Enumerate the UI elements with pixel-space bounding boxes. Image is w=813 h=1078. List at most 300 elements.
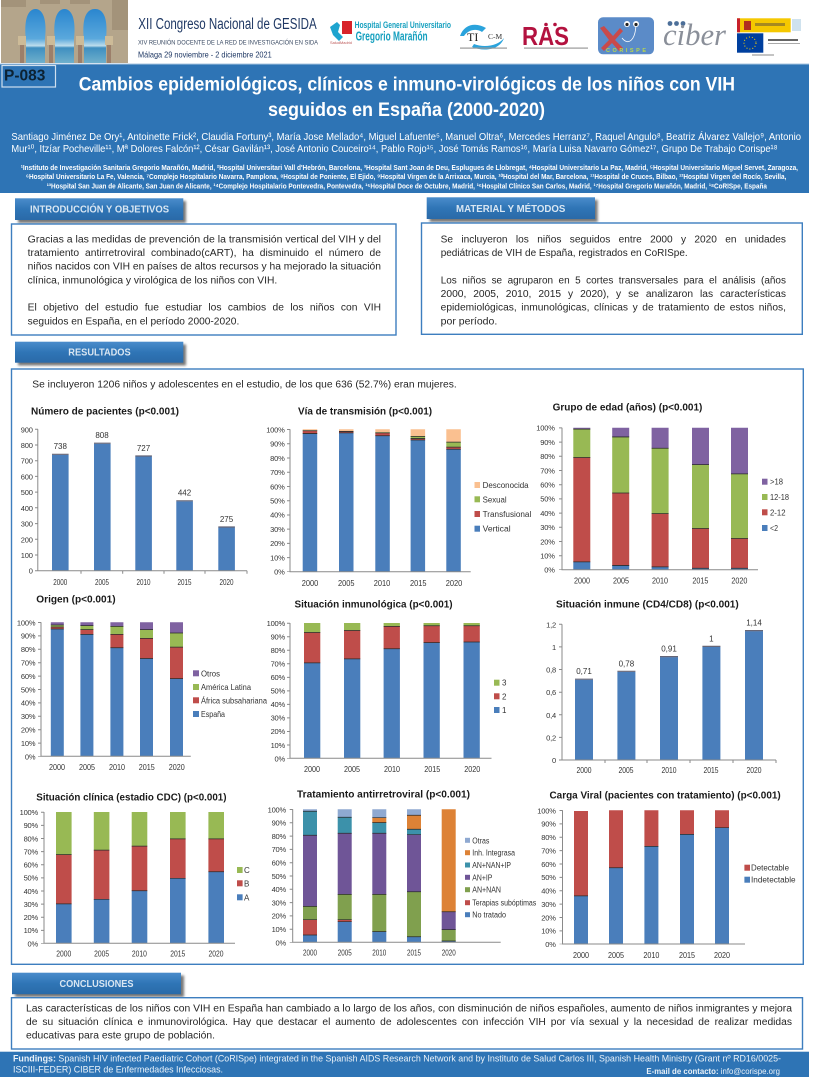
x axis labels: 2005 <box>613 577 629 586</box>
legend: 2-12 <box>770 508 786 517</box>
y axis labels: 20% <box>24 913 39 922</box>
chart title: Vía de transmisión (p<0.001) <box>298 406 432 418</box>
x axis labels: 2020 <box>220 578 234 587</box>
panel: introducción: niños nacidos con VIH en países de altos recursos y ha mejorado la situación <box>28 262 381 273</box>
panel: material y métodos: 2000, 2005, 2010, 2015 y 2020), y se analizaron las características <box>441 289 786 300</box>
x axis labels: 2010 <box>643 951 660 960</box>
y axis labels: 40% <box>24 887 39 896</box>
y axis labels: 70% <box>540 466 555 475</box>
legend: >18 <box>770 478 784 487</box>
x axis labels <box>576 766 762 775</box>
y axis labels: 50% <box>270 496 285 506</box>
y axis labels: 100% <box>266 425 285 434</box>
y axis labels: 10% <box>21 739 36 748</box>
legend: C <box>244 866 250 875</box>
legend <box>193 669 268 719</box>
x axis labels <box>302 579 463 588</box>
x axis labels: 2010 <box>384 765 400 774</box>
poster number <box>2 66 56 87</box>
x axis labels: 2020 <box>714 951 730 960</box>
y axis labels: 70% <box>541 846 556 855</box>
x axis labels: 2005 <box>344 765 360 774</box>
funding text: ISCIII-FEDER) CIBER de Enfermedades Infecciosas. <box>13 1065 223 1076</box>
x axis labels: 2010 <box>372 949 387 958</box>
y axis labels: 500 <box>21 488 33 497</box>
panel: material y métodos: pediátricas de VIH de España, registrados en CoRISpe. <box>441 248 688 259</box>
x axis labels: 2010 <box>662 766 677 775</box>
logo: RIS: RAS <box>522 21 569 51</box>
chart: origen <box>17 594 268 772</box>
header logos strip <box>1 0 801 63</box>
value labels: 1,14 <box>746 619 762 628</box>
x axis labels: 2000 <box>302 579 319 588</box>
x axis labels: 2005 <box>608 951 624 960</box>
series: Detectable <box>574 810 729 896</box>
logo: hospital <box>330 20 451 45</box>
legend: España <box>201 710 225 719</box>
x axis labels: 2005 <box>618 766 634 775</box>
series: estadio 2 <box>304 626 480 663</box>
value labels <box>54 431 234 524</box>
panel: introducción: tratamiento antirretroviral combinado(cART), ha disminuido el número de <box>28 248 381 259</box>
y axis labels: 700 <box>21 457 33 466</box>
logo: hospital: Gregorio Marañón <box>356 29 428 44</box>
legend: <2 <box>770 524 778 533</box>
y axis labels: 400 <box>21 504 33 513</box>
x axis labels: 2000 <box>49 763 65 772</box>
y axis labels: 100% <box>20 808 39 817</box>
x axis labels: 2005 <box>95 578 109 587</box>
y axis labels: 900 <box>21 425 33 434</box>
series: menor de 2 <box>573 562 748 570</box>
series: estadio 3 <box>304 623 480 632</box>
x axis labels: 2020 <box>169 763 185 772</box>
legend: Otros <box>201 669 220 678</box>
legend: 12-18 <box>770 493 790 502</box>
x axis labels: 2000 <box>576 766 592 775</box>
logo: ciber: ciber <box>663 17 727 52</box>
y axis labels: 60% <box>541 860 556 869</box>
congress photo: moorish arches <box>1 0 128 63</box>
chart title: Situación inmune (CD4/CD8) (p<0.001) <box>556 598 739 610</box>
section header: material y métodos: MATERIAL Y MÉTODOS <box>456 202 566 215</box>
y axis labels: 70% <box>271 660 286 669</box>
x axis labels: 2015 <box>178 578 192 587</box>
legend <box>465 836 536 920</box>
panel: material y métodos: por período. <box>441 317 497 328</box>
series: Inh. Integrasa <box>372 809 456 912</box>
y axis labels: 100% <box>267 619 286 628</box>
x axis labels: 2005 <box>79 763 95 772</box>
y axis labels: 10% <box>270 554 285 562</box>
chart title: Tratamiento antirretroviral (p<0.001) <box>297 789 470 801</box>
series: Terapias subóptimas <box>303 920 352 935</box>
legend: 1 <box>502 706 507 715</box>
logo: TI-C-M: C-M <box>488 32 502 41</box>
y axis labels: 0% <box>28 939 39 948</box>
panel: introducción: Gracias a las medidas de prevención de la transmisión vertical del VIH y del <box>28 234 381 245</box>
legend: AN+IP <box>472 873 492 882</box>
y axis labels <box>537 806 556 949</box>
y axis labels: 80% <box>24 834 39 843</box>
logo: TI-C-M: TI <box>467 30 478 44</box>
series: Transfusional <box>303 431 461 449</box>
y axis labels: 70% <box>21 658 36 668</box>
panel: resultados <box>12 369 803 964</box>
affiliations <box>21 165 798 190</box>
y axis labels: 80% <box>272 832 287 841</box>
series: 2-12 <box>573 458 748 568</box>
value labels: 727 <box>137 444 151 453</box>
section header: introducción y objetivos <box>15 198 186 223</box>
stacked bars <box>573 428 748 570</box>
y axis labels: 0% <box>275 754 286 763</box>
legend: Indetectable <box>751 876 796 885</box>
y axis labels: 60% <box>21 672 36 681</box>
panel: material y métodos: Los niños se agruparon en 5 cortes transversales para el análisis (años <box>441 275 786 286</box>
y axis labels: 60% <box>270 482 285 491</box>
y axis labels: 0% <box>276 938 287 947</box>
stacked bars <box>303 809 456 942</box>
y axis labels: 90% <box>24 821 39 830</box>
y axis labels <box>21 425 33 576</box>
y axis labels: 30% <box>24 900 39 909</box>
panel: introducción: El objetivo del estudio fue estudiar los cambios de los niños con VIH <box>28 303 381 314</box>
y axis labels: 60% <box>271 673 286 682</box>
legend <box>762 478 790 533</box>
x axis labels: 2005 <box>94 950 110 959</box>
series: AN+IP <box>303 833 456 930</box>
x axis labels: 2010 <box>374 579 391 588</box>
y axis labels: 0% <box>25 752 36 761</box>
y axis labels: 50% <box>272 872 287 881</box>
legend <box>744 864 796 885</box>
y axis labels: 0% <box>544 566 555 575</box>
y axis labels: 40% <box>272 885 287 894</box>
chart: carga viral <box>537 790 796 960</box>
x axis labels: 2000 <box>303 949 317 958</box>
panel: conclusiones: Las características de los niños con VIH en España han cambiado a lo largo de los años, con disminución de niños españoles, aumento de niños inmigrantes y mejora <box>26 1004 792 1015</box>
y axis labels: 40% <box>21 699 36 708</box>
legend: B <box>244 879 249 888</box>
panel: conclusiones: educativas para este grupo de población. <box>26 1030 215 1041</box>
legend: Sexual <box>483 495 507 504</box>
footer: funding and contact <box>0 1052 809 1077</box>
x axis labels <box>574 577 748 586</box>
x axis labels <box>304 765 481 774</box>
y axis labels: 80% <box>540 452 555 461</box>
y axis labels: 40% <box>540 509 555 518</box>
legend: 2 <box>502 692 507 701</box>
series: 12-18 <box>573 429 748 538</box>
stacked bars <box>303 429 461 572</box>
legend: Inh. Integrasa <box>472 849 515 858</box>
congress subtitle: XIV REUNIÓN DOCENTE DE LA RED DE INVESTIGACIÓN EN SIDA <box>138 39 318 46</box>
x axis labels: 2005 <box>338 579 355 588</box>
chart title: Grupo de edad (años) (p<0.001) <box>553 401 702 413</box>
y axis labels: 100% <box>536 424 555 433</box>
chart: situación inmune CD4/CD8 <box>546 598 776 775</box>
results summary: Se incluyeron 1206 niños y adolescentes en el estudio, de los que 636 (52.7%) eran mujeres. <box>32 379 457 390</box>
panel: introducción <box>12 224 396 335</box>
x axis labels: 2015 <box>679 951 695 960</box>
chart: grupo de edad <box>536 401 790 586</box>
x axis labels: 2020 <box>731 577 748 586</box>
series: África subsahariana <box>51 627 183 679</box>
x axis labels: 2015 <box>692 577 709 586</box>
x axis labels <box>56 950 224 959</box>
legend: Detectable <box>751 864 790 873</box>
y axis labels: 0,2 <box>546 733 556 742</box>
panel: material y métodos: epidemiológicas, inmunológicas, clínicas y de tratamiento de estos niños, <box>441 303 786 314</box>
panel: material y métodos <box>422 223 802 334</box>
funding text <box>13 1054 781 1076</box>
y axis labels: 0,6 <box>546 688 556 697</box>
value labels: 0,71 <box>576 667 592 676</box>
chart title: Carga Viral (pacientes con tratamiento) (p<0.001) <box>550 790 781 802</box>
bars <box>52 444 235 571</box>
y axis labels: 40% <box>541 886 556 896</box>
y axis labels: 0,8 <box>546 666 556 674</box>
legend: 3 <box>502 679 507 688</box>
poster number: P-083 <box>4 68 46 84</box>
legend: América Latina <box>201 683 252 692</box>
y axis labels: 300 <box>21 520 33 529</box>
authors <box>11 130 801 155</box>
panel: conclusiones <box>12 998 802 1049</box>
x axis labels: 2010 <box>652 577 668 586</box>
legend: Vertical <box>483 525 511 534</box>
chart title: Situación clínica (estadio CDC) (p<0.001) <box>36 791 226 803</box>
chart: situación inmunológica <box>267 598 507 774</box>
y axis labels: 50% <box>540 495 555 504</box>
x axis labels: 2015 <box>704 766 719 775</box>
series: Vertical <box>303 433 461 572</box>
y axis labels: 90% <box>541 820 556 829</box>
y axis labels: 40% <box>270 511 285 520</box>
y axis labels: 70% <box>272 845 287 854</box>
y axis labels: 70% <box>270 468 285 477</box>
legend <box>494 679 507 715</box>
y axis labels: 80% <box>21 645 36 654</box>
y axis labels: 30% <box>271 714 286 723</box>
y axis labels <box>268 805 287 947</box>
y axis labels: 50% <box>271 687 286 696</box>
value labels: 0,91 <box>661 645 677 654</box>
x axis labels: 2000 <box>304 765 320 774</box>
y axis labels: 10% <box>24 926 39 935</box>
series: Desconocida <box>303 429 461 442</box>
section header: conclusiones: CONCLUSIONES <box>60 979 134 990</box>
value labels <box>576 619 762 676</box>
y axis labels <box>17 618 36 761</box>
legend: Desconocida <box>483 481 529 490</box>
y axis labels: 40% <box>271 700 286 709</box>
y axis labels: 90% <box>540 438 555 447</box>
poster title: seguidos en España (2000-2020) <box>268 99 545 121</box>
y axis labels: 20% <box>541 913 556 922</box>
x axis labels: 2000 <box>574 577 590 586</box>
series: mayor de 18 <box>573 428 748 474</box>
y axis labels: 90% <box>272 819 287 828</box>
y axis labels: 30% <box>270 525 285 534</box>
legend: Otras <box>472 836 489 845</box>
y axis labels: 0% <box>274 568 285 577</box>
y axis labels: 20% <box>540 537 555 546</box>
y axis labels: 30% <box>541 900 556 909</box>
chart title: Origen (p<0.001) <box>36 594 116 606</box>
y axis labels: 20% <box>271 727 286 736</box>
y axis labels: 80% <box>271 646 286 655</box>
series: Otras <box>303 809 421 818</box>
x axis labels: 2020 <box>446 579 463 588</box>
x axis labels: 2000 <box>573 951 589 960</box>
y axis labels: 10% <box>272 925 287 934</box>
y axis labels: 600 <box>21 472 33 481</box>
series: AN+NAN+IP <box>303 811 421 835</box>
chart: tratamiento antirretroviral <box>268 789 536 958</box>
stacked bars <box>51 622 183 756</box>
y axis labels: 100% <box>537 806 556 815</box>
y axis labels: 30% <box>540 523 555 532</box>
y axis labels: 50% <box>541 873 556 882</box>
series: B <box>56 839 224 904</box>
y axis labels: 0,4 <box>546 711 556 720</box>
y axis labels: 20% <box>21 726 36 734</box>
series: España <box>51 629 183 756</box>
section header: introducción y objetivos: INTRODUCCIÓN Y OBJETIVOS <box>30 203 169 216</box>
y axis labels: 80% <box>270 454 285 463</box>
series: No tratado <box>303 922 456 942</box>
value labels: 0,78 <box>619 660 635 669</box>
panel: conclusiones: de su situación clínica e inmunovirológica. Hay que destacar el aumento de adolescentes con infección VIH por vía sexual y la necesidad de realizar medidas <box>26 1017 792 1028</box>
x axis labels: 2010 <box>136 578 151 587</box>
y axis labels: 1,2 <box>546 620 556 629</box>
series: C <box>56 812 224 855</box>
bars <box>575 631 763 760</box>
x axis labels <box>53 578 234 587</box>
y axis labels: 20% <box>272 912 287 921</box>
panel: introducción: clínica, inmunológica y virológica de los niños con VIH. <box>28 276 277 287</box>
section header: resultados <box>15 342 186 366</box>
stacked bars <box>574 810 729 944</box>
section header: material y métodos <box>427 197 598 222</box>
poster title: Cambios epidemiológicos, clínicos e inmuno-virológicos de los niños con VIH <box>79 74 735 96</box>
y axis labels <box>536 424 555 575</box>
poster title <box>79 74 735 121</box>
y axis labels <box>266 425 285 577</box>
y axis labels: 60% <box>272 858 287 868</box>
x axis labels: 2020 <box>442 949 456 958</box>
x axis labels: 2000 <box>56 950 72 959</box>
series: estadio 1 <box>304 642 480 758</box>
y axis labels: 30% <box>21 712 36 721</box>
y axis labels <box>20 808 39 948</box>
x axis labels: 2015 <box>410 579 427 588</box>
y axis labels: 10% <box>541 927 556 936</box>
y axis labels: 50% <box>24 874 39 883</box>
y axis labels: 70% <box>24 847 39 856</box>
chart: vía de transmisión <box>266 406 532 588</box>
y axis labels: 10% <box>271 741 286 750</box>
x axis labels: 2010 <box>109 763 125 772</box>
panel: introducción: seguidos en España, en el período 2000-2020. <box>28 316 239 327</box>
x axis labels: 2005 <box>338 949 352 958</box>
y axis labels <box>267 619 286 763</box>
title band <box>0 64 809 193</box>
y axis labels: 0% <box>545 940 556 949</box>
y axis labels: 800 <box>21 441 33 450</box>
x axis labels: 2010 <box>132 950 147 959</box>
y axis labels: 60% <box>24 860 39 870</box>
y axis labels: 50% <box>21 685 36 694</box>
y axis labels: 100% <box>268 805 287 814</box>
x axis labels <box>49 763 185 772</box>
y axis labels: 90% <box>270 440 285 449</box>
y axis labels: 90% <box>21 632 36 641</box>
stacked bars <box>304 623 480 758</box>
y axis labels <box>546 620 556 765</box>
x axis labels <box>303 949 456 958</box>
x axis labels: 2015 <box>407 949 421 958</box>
legend: Terapias subóptimas <box>472 899 536 908</box>
value labels: 442 <box>178 489 192 498</box>
logo: CoRISpe: CORISPE <box>606 48 646 54</box>
y axis labels: 90% <box>271 632 286 642</box>
x axis labels: 2015 <box>170 950 186 959</box>
value labels: 275 <box>220 515 234 524</box>
section header: conclusiones <box>12 973 184 997</box>
affiliations: ¹³Hospital San Juan de Alicante, San Juan de Alicante, ¹⁴Complejo Hospitalario Pontevedra, Pontevedra, ¹⁵Hospital Doce de Octubre, Madrid, ¹⁶Hospital Clínico San Carlos, Madrid, ¹⁷Hospital Gregorio Marañón, Madrid, ¹⁸CoRISpe, España <box>47 183 767 190</box>
value labels: 808 <box>95 431 109 440</box>
contact email: E-mail de contacto: info@corispe.org <box>646 1066 780 1076</box>
value labels: 1 <box>709 634 714 643</box>
x axis labels: 2020 <box>746 766 762 775</box>
x axis labels: 2000 <box>53 578 68 587</box>
y axis labels: 30% <box>272 898 287 907</box>
legend: África subsahariana <box>201 696 268 705</box>
legend: No tratado <box>472 911 506 920</box>
congress date: Málaga 29 noviembre - 2 diciembre 2021 <box>138 49 272 59</box>
y axis labels: 20% <box>270 539 285 548</box>
series: AN+NAN <box>303 892 456 941</box>
chart: situación clínica <box>20 791 250 959</box>
x axis labels: 2020 <box>208 950 224 959</box>
x axis labels: 2020 <box>464 765 481 774</box>
x axis labels: 2015 <box>139 763 155 772</box>
y axis labels: 100 <box>21 551 33 560</box>
series: Otros <box>51 622 183 633</box>
y axis labels: 0 <box>552 756 556 765</box>
legend <box>474 481 532 534</box>
section header: resultados: RESULTADOS <box>68 348 131 359</box>
legend: AN+NAN <box>472 886 501 895</box>
legend: A <box>244 893 250 902</box>
legend: AN+NAN+IP <box>472 861 511 870</box>
x axis labels <box>573 951 730 960</box>
series: Indetectable <box>574 828 729 944</box>
series: A <box>56 872 224 943</box>
congress title: XII Congreso Nacional de GESIDA <box>138 16 317 33</box>
funding text: Fundings: Spanish HIV infected Paediatric Cohort (CoRISpe) integrated in the Spanish AIDS Research Network and by Instituto de Salud Carlos III, Spanish Health Ministry (Grant nº RD16/0025- <box>13 1054 781 1065</box>
stacked bars <box>56 812 224 943</box>
y axis labels: 60% <box>540 480 555 490</box>
legend <box>237 866 250 902</box>
y axis labels: 200 <box>21 535 33 544</box>
y axis labels: 80% <box>541 833 556 842</box>
logo: Spanish government and EU flags <box>737 18 801 56</box>
y axis labels: 10% <box>540 552 555 560</box>
